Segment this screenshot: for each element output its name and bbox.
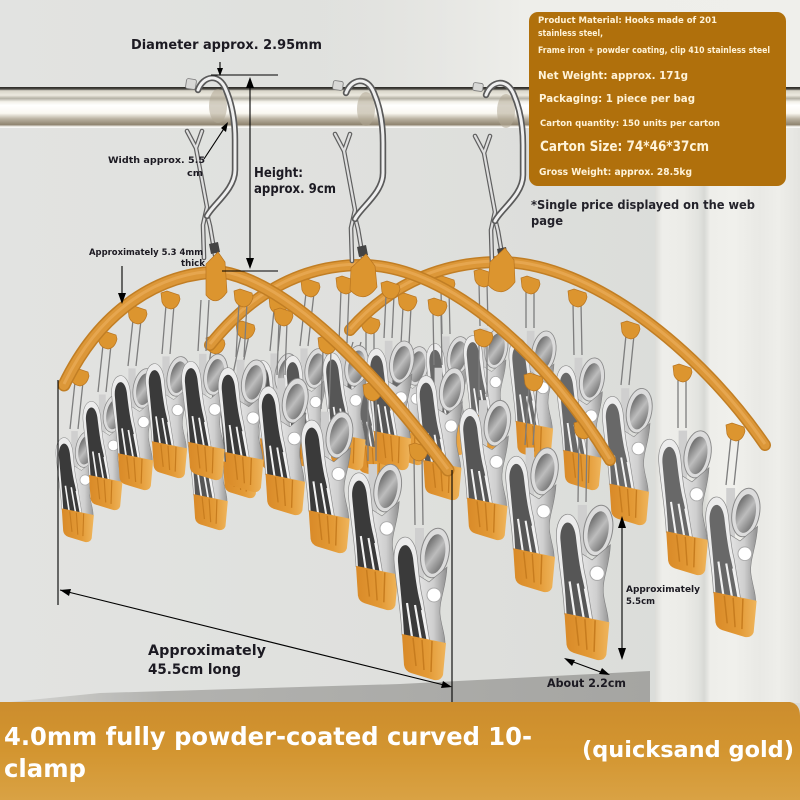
note: single price: *Single price displayed on the web: [531, 198, 755, 212]
banner title: 4.0mm fully powder-coated curved 10-: [4, 722, 532, 751]
label: width: [108, 156, 205, 179]
label: height: Height:: [254, 166, 303, 181]
note: single price: [531, 198, 755, 228]
banner title: [4, 722, 532, 783]
banner colour name: (quicksand gold): [582, 738, 794, 763]
label: length: 45.5cm long: [148, 662, 241, 678]
label: thickness: thick: [181, 259, 205, 269]
hooks over the rail: [187, 78, 523, 301]
label: clip height: Approximately: [626, 585, 700, 595]
label: diameter: Diameter approx. 2.95mm: [131, 38, 322, 53]
label: length: [148, 643, 266, 678]
panel: product specifications: stainless steel,: [538, 29, 603, 39]
label: height: [254, 166, 336, 197]
panel: product specifications: Carton Size: 74*46*37cm: [540, 139, 709, 155]
panel: product specifications: Packaging: 1 piece per bag: [539, 92, 695, 105]
panel: product specifications: Frame iron + powder coating, clip 410 stainless steel: [538, 46, 770, 56]
chrome rail: [0, 87, 800, 128]
banner title: clamp: [4, 754, 86, 783]
dimension labels: [89, 38, 700, 690]
dimension lines and arrows: [58, 62, 626, 702]
panel: product specifications: Gross Weight: approx. 28.5kg: [539, 167, 692, 178]
rail clamp caps: [185, 78, 484, 92]
back hanger (third): [336, 261, 765, 637]
middle hanger (second): [187, 264, 617, 660]
panel: product specifications: [529, 12, 786, 186]
label: length: Approximately: [148, 643, 266, 659]
label: width: Width approx. 5.5: [108, 156, 205, 166]
panel: product specifications: Product Material: Hooks made of 201: [538, 16, 717, 26]
label: thickness: [89, 248, 205, 269]
label: clip height: [626, 585, 700, 607]
panel: product specifications: Carton quantity: 150 units per carton: [540, 119, 720, 129]
label: height: approx. 9cm: [254, 182, 336, 197]
label: thickness: Approximately 5.3 4mm: [89, 248, 203, 258]
panel: product specifications: Net Weight: approx. 171g: [538, 69, 688, 82]
label: width: cm: [187, 169, 203, 179]
bottom banner: [0, 702, 800, 800]
note: single price: page: [531, 214, 563, 228]
label: clip height: 5.5cm: [626, 597, 655, 607]
label: clip width: About 2.2cm: [547, 676, 626, 690]
front hanger (first): [56, 271, 453, 680]
